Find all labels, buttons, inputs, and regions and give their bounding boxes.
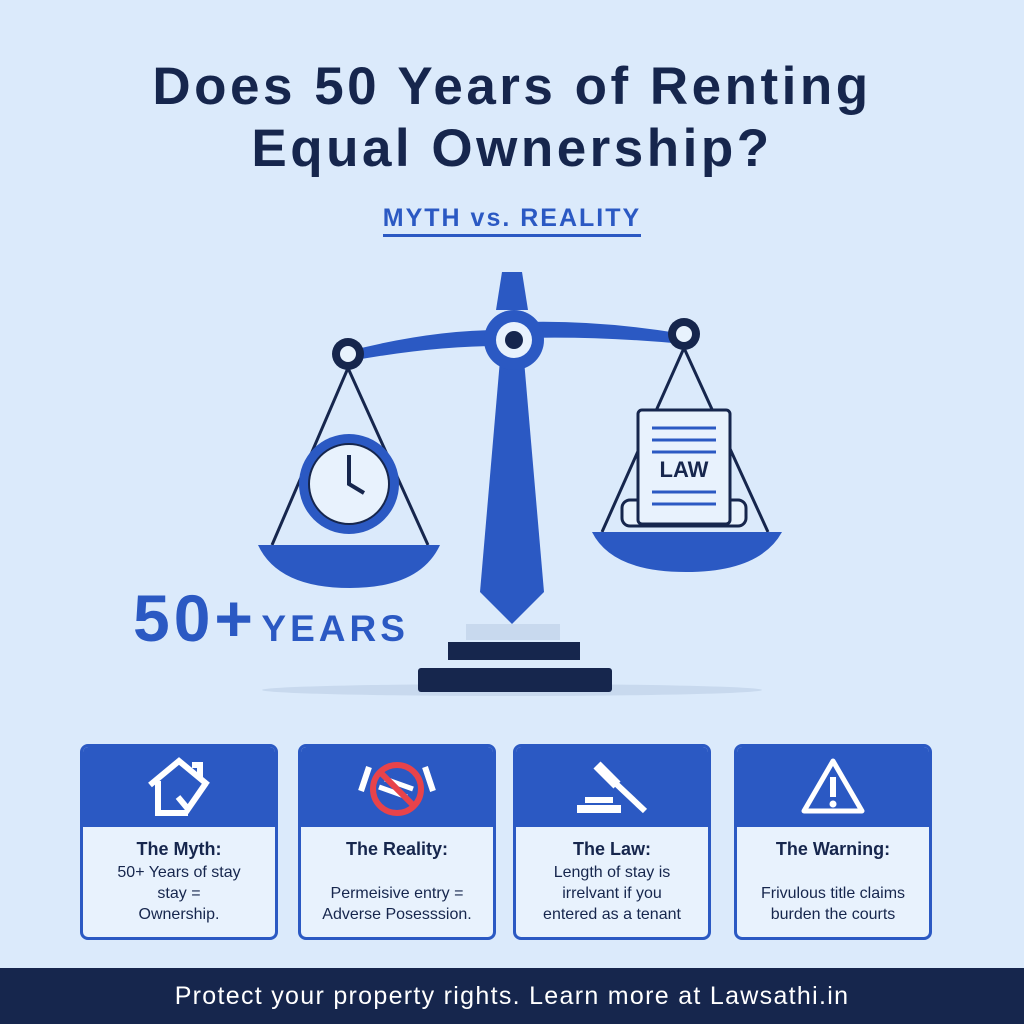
card: warning (734, 744, 932, 940)
footer (0, 968, 1024, 1024)
card: myth: The Myth: (136, 839, 222, 859)
title (152, 57, 872, 178)
footer: Protect your property rights. Learn more at Lawsathi.in (175, 982, 849, 1010)
card: warning: burden the courts (771, 906, 895, 923)
subtitle: MYTH vs. REALITY (383, 204, 641, 232)
title: Equal Ownership? (251, 119, 773, 178)
title: Does 50 Years of Renting (152, 57, 872, 116)
card: law: Length of stay is (554, 864, 670, 881)
card: law: The Law: (573, 839, 651, 859)
50+ years label: 50+ YEARS (133, 581, 409, 655)
card: reality (298, 744, 496, 940)
card: myth: 50+ Years of stay (117, 864, 241, 881)
card: reality: Permeisive entry = (331, 885, 463, 902)
card: law (513, 744, 711, 940)
card: myth (80, 744, 278, 940)
card: warning: Frivulous title claims (761, 885, 905, 902)
icon: law document (622, 410, 746, 526)
card: law: entered as a tenant (543, 906, 681, 923)
icon: law document: LAW (660, 457, 709, 482)
card: reality: The Reality: (346, 839, 448, 859)
icon: clock (299, 434, 399, 534)
card: myth: stay = (157, 885, 201, 902)
card: law: irrelvant if you (562, 885, 662, 902)
card: warning: The Warning: (776, 839, 890, 859)
card: reality: Adverse Posesssion. (322, 906, 472, 923)
card: myth: Ownership. (139, 906, 219, 923)
